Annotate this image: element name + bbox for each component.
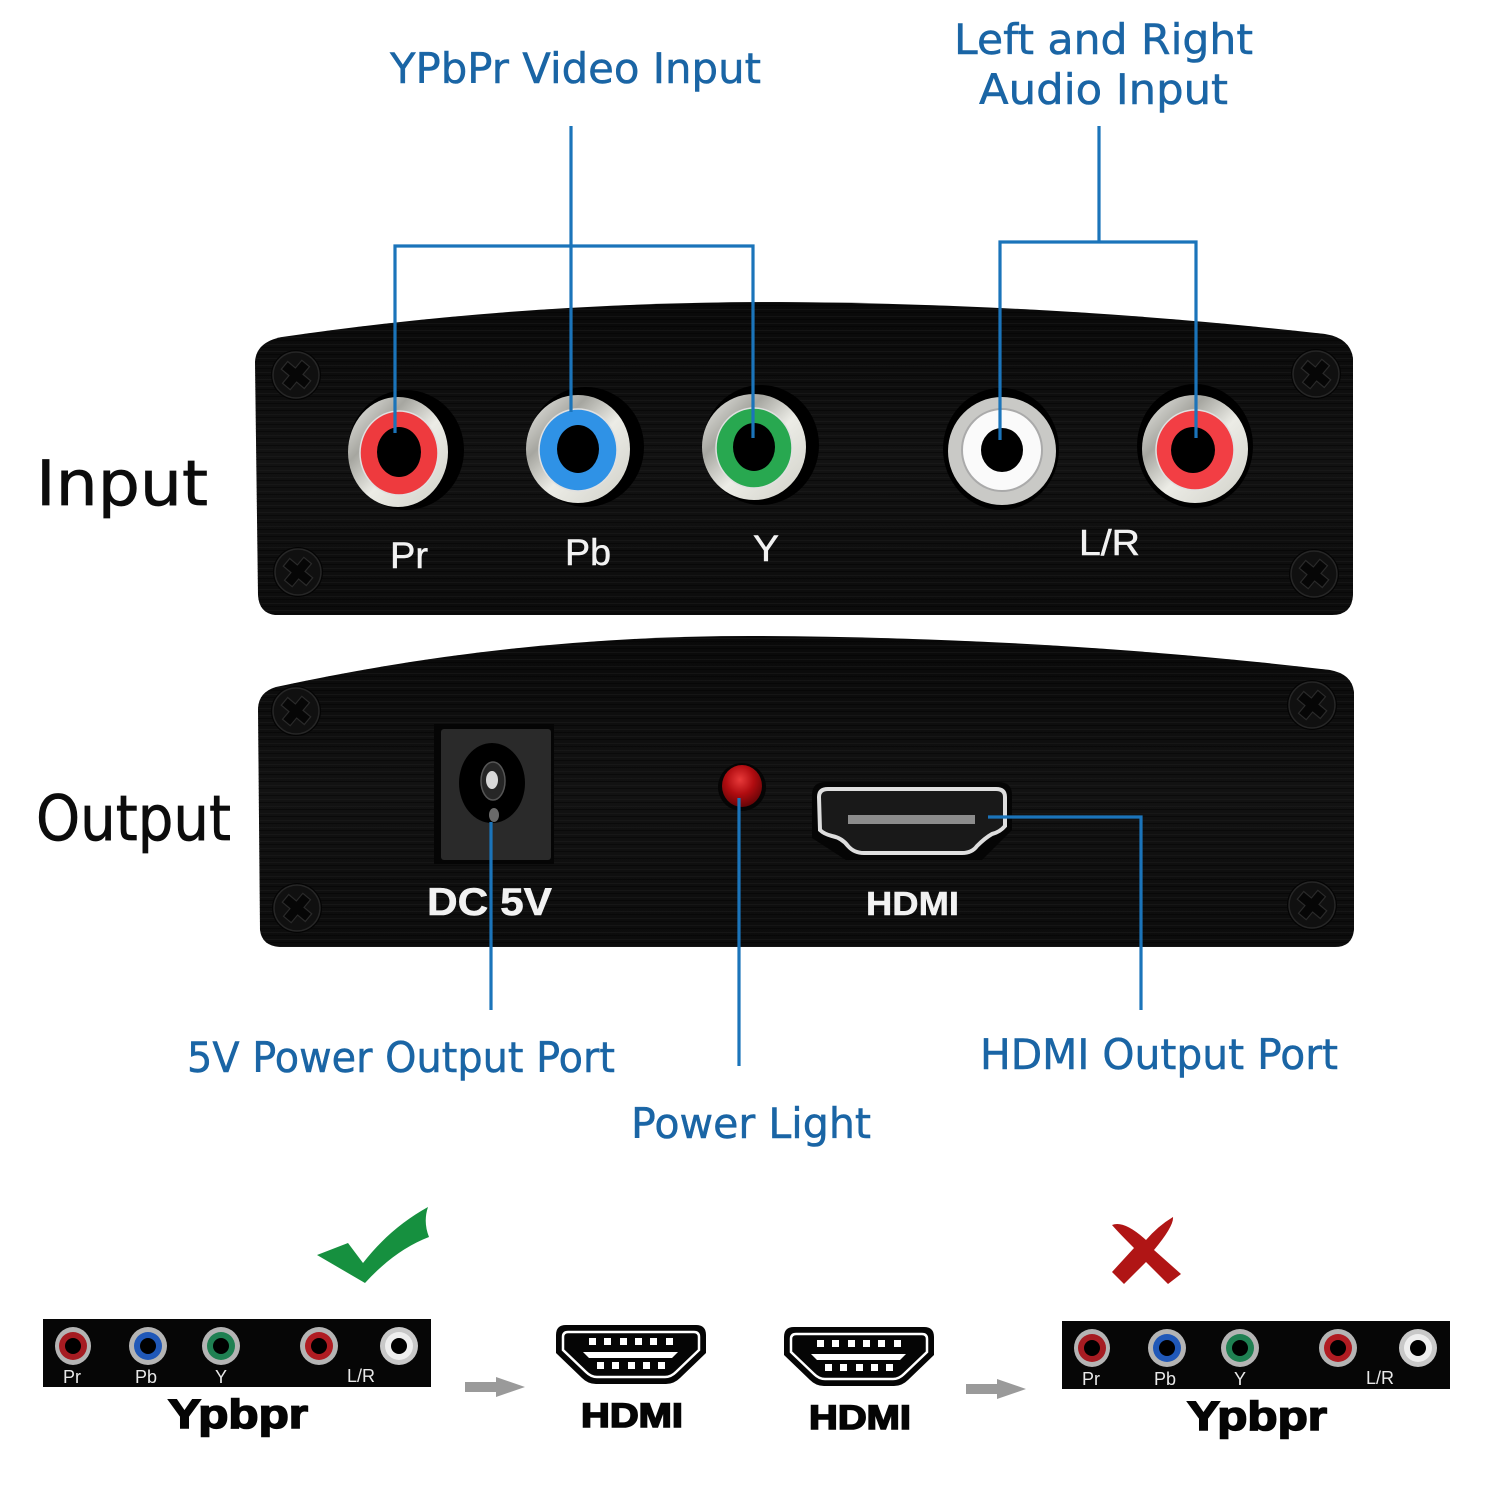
text: Ypbpr left: Ypbpr <box>168 1391 308 1437</box>
text: L/R: L/R <box>1079 522 1140 563</box>
callout line: HDMI output <box>988 817 1141 1010</box>
callout lines: YPbPr inputs <box>395 126 753 438</box>
icon: HDMI connector left <box>556 1325 706 1384</box>
text: Pr: Pr <box>390 535 428 576</box>
heading: Left and Right Audio Input: Audio Input <box>979 65 1228 114</box>
arrow: Ypbpr to HDMI <box>465 1377 525 1397</box>
label: Input: Input <box>36 447 208 520</box>
jack: audio left white <box>943 388 1059 510</box>
text: Pb: Pb <box>565 532 611 573</box>
callout line: 5V power port <box>489 822 493 1010</box>
strip labels: Pr <box>63 1367 81 1387</box>
text: HDMI left: HDMI <box>581 1397 683 1435</box>
label: Power Light: Power Light <box>631 1099 871 1148</box>
panel: input side of converter <box>255 302 1353 615</box>
icon: red power LED <box>718 763 766 811</box>
icon: red cross <box>1112 1217 1181 1284</box>
strip labels <box>63 1366 375 1387</box>
HDMI socket <box>812 782 1012 860</box>
strip labels right: Pr <box>1082 1369 1100 1389</box>
strip labels right: Pb <box>1154 1369 1176 1389</box>
label: 5V Power Output Port: 5V Power Output Port <box>187 1033 615 1082</box>
strip labels right: L/R <box>1366 1368 1394 1388</box>
DC power jack <box>434 724 554 864</box>
strip labels right <box>1082 1368 1394 1389</box>
icon: HDMI connector right <box>784 1327 934 1386</box>
jack: Pb blue <box>526 387 644 507</box>
strip labels right: Y <box>1234 1369 1246 1389</box>
callout lines: audio inputs <box>1000 126 1196 440</box>
strip labels: Pb <box>135 1367 157 1387</box>
heading: Left and Right Audio Input <box>954 15 1253 114</box>
jack: Pr red <box>348 390 464 510</box>
jack: Y green <box>702 385 819 505</box>
panel: output side of converter <box>258 636 1354 947</box>
icon: panel screws <box>271 349 1341 599</box>
strip labels: L/R <box>347 1366 375 1386</box>
strip jacks right <box>1074 1329 1437 1367</box>
arrow: HDMI to Ypbpr <box>966 1379 1026 1399</box>
text: Y: Y <box>753 528 779 569</box>
heading: YPbPr Video Input: YPbPr Video Input <box>389 44 761 93</box>
strip jacks <box>55 1327 418 1365</box>
callout line: power light <box>737 798 741 1066</box>
text: Ypbpr right: Ypbpr <box>1187 1393 1327 1439</box>
diagram: supported YPbPr strip <box>43 1319 431 1387</box>
diagram: unsupported YPbPr strip <box>1062 1321 1450 1389</box>
label: HDMI Output Port: HDMI Output Port <box>980 1030 1338 1079</box>
strip labels: Y <box>215 1367 227 1387</box>
icon: green check mark <box>317 1207 429 1283</box>
heading: Left and Right Audio Input: Left and Right <box>954 15 1253 64</box>
icon: output panel screws <box>271 680 1337 933</box>
label: Output: Output <box>36 782 231 855</box>
text: HDMI socket label: HDMI <box>866 885 959 922</box>
jack: audio right red <box>1137 384 1253 508</box>
text: DC 5V: DC 5V <box>427 881 552 924</box>
text: HDMI right: HDMI <box>809 1399 911 1437</box>
